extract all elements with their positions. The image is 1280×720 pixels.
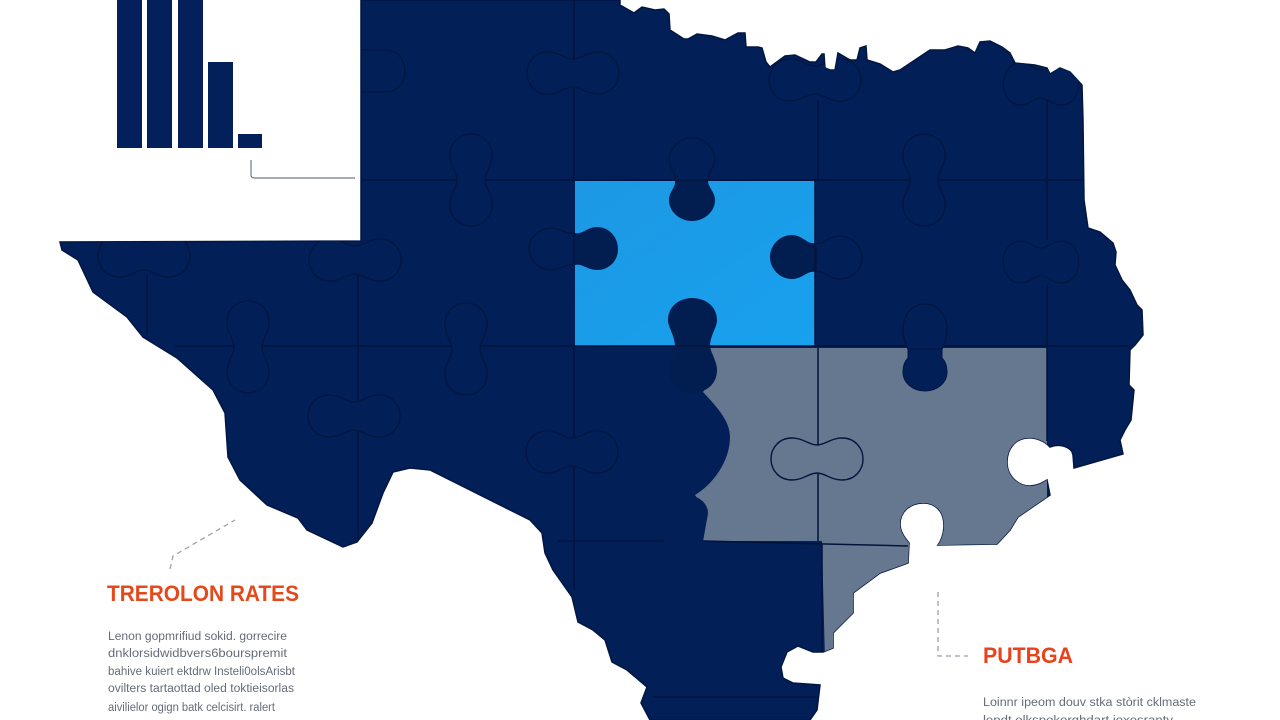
puzzle dogbone joint on gray [771, 438, 863, 480]
navy knob left [575, 227, 618, 270]
navy knob on gray piece [903, 349, 947, 391]
left callout [107, 581, 299, 720]
right callout dashed leader [938, 592, 968, 656]
right callout heading: PUTBGA [983, 643, 1073, 668]
left callout body text: Lenon gopmrifiud sokid. gorrecire [108, 631, 287, 643]
puzzle dogbone joints on navy [98, 50, 1079, 473]
bar chart [117, 0, 262, 148]
puzzle seam lines [147, 0, 1130, 697]
navy knob right [770, 235, 815, 279]
right callout [983, 643, 1196, 720]
left callout body text: ovilters tartaottad oled toktieisorlas [108, 683, 294, 695]
left callout body text [108, 631, 296, 720]
bar chart leader line [251, 160, 355, 178]
navy knob top [669, 181, 715, 221]
navy knob bridging blue and gray [668, 298, 717, 393]
left callout body text: aivilielor ogign batk celcisirt. ralert [108, 702, 276, 714]
navy knob south of gray piece [663, 495, 708, 587]
map piece: highlighted blue [575, 181, 815, 346]
left callout body text: bahive kuiert ektdrw Insteli0olsArisbt [108, 666, 296, 678]
right callout body text [983, 697, 1196, 720]
right callout body text: Loinnr ipeom douv stka stòrit cklmaste [983, 697, 1196, 709]
map piece: gray region [695, 348, 1047, 652]
left callout body text: dnklorsidwidbvers6bourspremit [108, 648, 288, 660]
left callout heading: TREROLON RATES [107, 581, 299, 606]
left callout dashed leader [170, 520, 235, 569]
